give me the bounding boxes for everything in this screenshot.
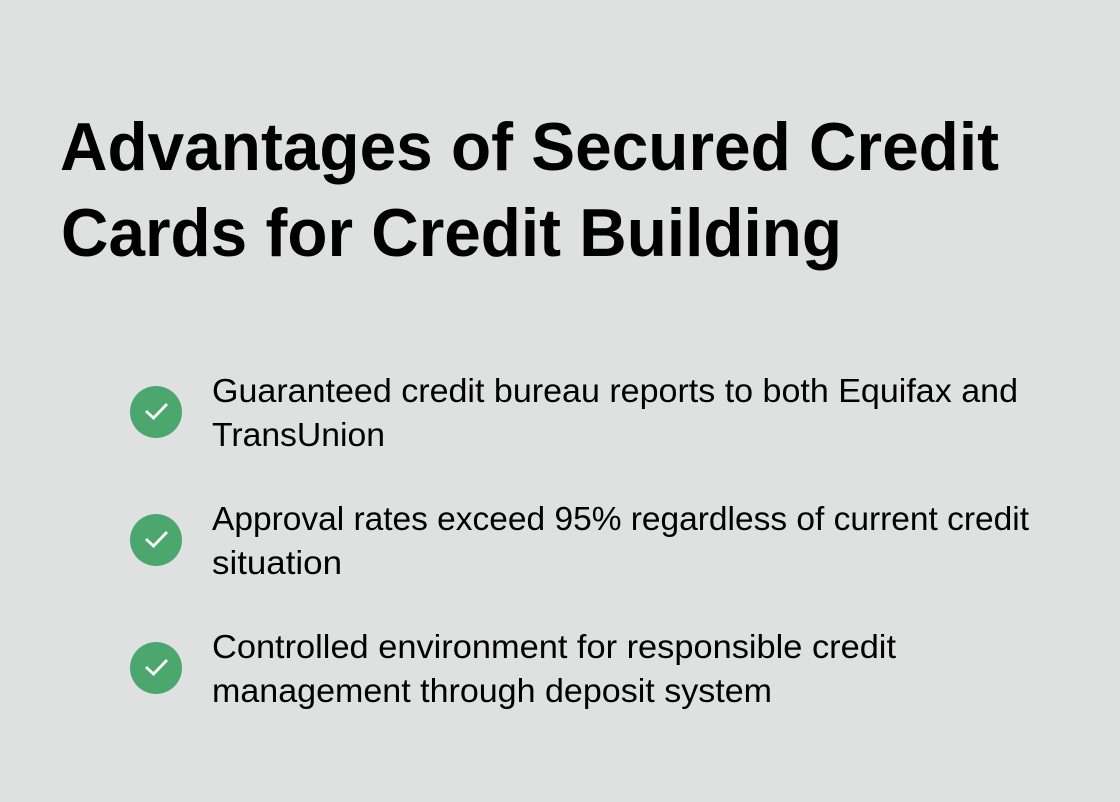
list item: approval rates	[130, 500, 1029, 581]
text: approval rates: Approval rates exceed 95% regardless of current credit	[212, 500, 1029, 537]
icon: green check 2	[130, 514, 182, 566]
list item: credit bureau reports	[130, 372, 1018, 453]
title	[60, 109, 999, 271]
icon: green check 1	[130, 386, 182, 438]
text: controlled environment: Controlled environment for responsible credit	[212, 628, 896, 665]
text: approval rates	[212, 500, 1029, 581]
icon: green check 3	[130, 642, 182, 694]
text: controlled environment: management through deposit system	[212, 672, 772, 709]
title: Advantages of Secured Credit	[60, 109, 999, 185]
title: Cards for Credit Building	[61, 195, 842, 271]
text: credit bureau reports: Guaranteed credit bureau reports to both Equifax and	[212, 372, 1018, 409]
text: controlled environment	[212, 628, 896, 709]
text: approval rates: situation	[212, 544, 342, 581]
list item: controlled environment	[130, 628, 896, 709]
text: credit bureau reports: TransUnion	[212, 416, 385, 453]
text: credit bureau reports	[212, 372, 1018, 453]
